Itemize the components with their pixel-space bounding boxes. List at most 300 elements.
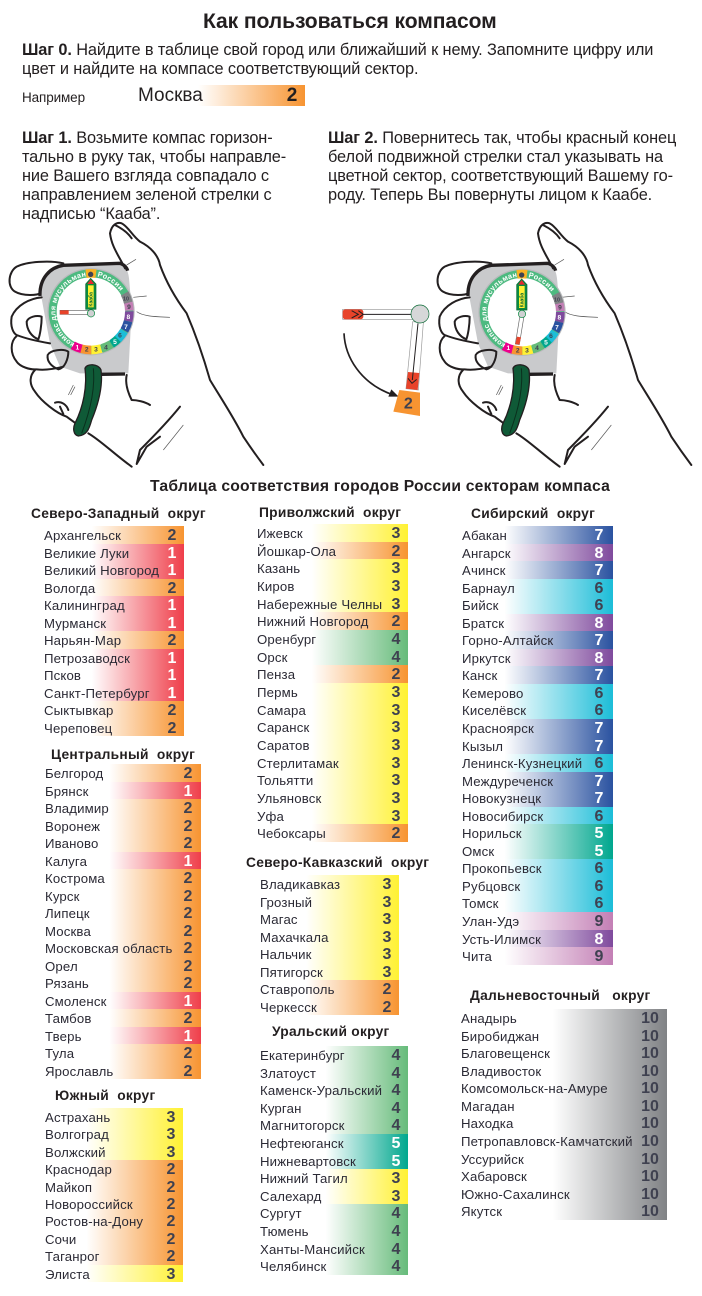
compass dial: 7: [555, 325, 559, 332]
table: Central district: Тамбов: [45, 1011, 92, 1026]
table: North-West district: 1: [168, 614, 176, 632]
hand outline: [438, 223, 691, 467]
heading: Ural district: Уральский округ: [272, 1024, 390, 1039]
table: Siberian district: 6: [595, 808, 603, 825]
table: North-West district: 2: [168, 632, 176, 649]
table: Central district: Тула: [45, 1046, 74, 1061]
table: Southern district: [45, 1108, 183, 1283]
table: Siberian district: 6: [595, 860, 603, 877]
heading: Central district: Центральный округ: [51, 747, 195, 762]
table: Siberian district: 7: [595, 790, 603, 807]
table: Siberian district: Чита: [462, 949, 492, 964]
table: Central district: Орел: [45, 958, 78, 974]
table: North-West district: Великие Луки: [44, 546, 129, 560]
table: Central district: 1: [184, 782, 192, 800]
table: North Caucasus district: 3: [383, 911, 391, 928]
table: Siberian district: Канск: [462, 668, 497, 683]
table: North-West district: 1: [168, 597, 176, 614]
table: Siberian district: 7: [595, 720, 603, 737]
compass dial: 6: [118, 332, 122, 339]
table: Central district: Брянск: [45, 784, 89, 798]
table: Volga district: 3: [392, 808, 400, 824]
table: Ural district: 4: [392, 1258, 400, 1275]
table: Southern district: Майкоп: [45, 1180, 92, 1195]
table: Central district: 2: [184, 818, 192, 834]
heading: Volga district: Приволжский округ: [259, 505, 401, 520]
table: North-West district: 1: [168, 684, 176, 702]
compass dial: 3: [525, 347, 529, 354]
table: Volga district: 4: [392, 649, 400, 666]
compass dial: 4: [104, 344, 108, 351]
table: Central district: 2: [184, 1062, 192, 1080]
compass dial: [48, 268, 135, 356]
table: Siberian district: 9: [595, 948, 603, 965]
table: Central district: Московская область: [45, 941, 172, 956]
table: North-West district: 1: [168, 667, 176, 684]
table: Southern district: Волжский: [45, 1145, 106, 1160]
table: Southern district: Элиста: [45, 1267, 90, 1282]
table: North-West district: Петрозаводск: [44, 650, 130, 666]
heading: Far East district: Дальневосточный округ: [470, 988, 650, 1003]
table: Central district: Иваново: [45, 836, 99, 851]
table: Volga district: Орск: [257, 650, 288, 665]
table: Ural district: 4: [392, 1047, 400, 1064]
table: Siberian district: Омск: [462, 844, 494, 859]
table: Far East district: 10: [641, 1203, 659, 1220]
table: Siberian district: Норильск: [462, 826, 522, 841]
compass dial: 6: [549, 333, 553, 340]
table: North-West district: Череповец: [44, 720, 112, 736]
table: Volga district: 2: [392, 543, 400, 560]
table: North Caucasus district: 2: [383, 998, 391, 1016]
table: Central district: Москва: [45, 924, 91, 938]
table: Volga district: 3: [392, 719, 400, 736]
white pointer pointing at sector 2: [515, 310, 526, 345]
table: Volga district: 2: [392, 825, 400, 842]
table: Siberian district: 7: [595, 632, 603, 649]
hand 2 with compass: [436, 222, 692, 468]
table: Siberian district: 7: [595, 738, 603, 755]
white pointer: [60, 310, 95, 317]
table: North-West district: [44, 526, 184, 736]
table: Siberian district: 8: [595, 931, 603, 948]
compass dial: России: [98, 272, 123, 291]
table: Ural district: 3: [392, 1170, 400, 1187]
table: Central district: [45, 764, 201, 1080]
table: Southern district: 2: [167, 1179, 175, 1196]
table: Siberian district: 8: [595, 615, 603, 632]
table: Volga district: 4: [392, 631, 400, 648]
example bar: Moscow: [138, 85, 305, 106]
table: Central district: Липецк: [45, 906, 90, 921]
compass dial: 10: [554, 297, 560, 303]
table: Ural district: 4: [392, 1100, 400, 1117]
table: Volga district: Уфа: [257, 808, 284, 824]
example bar: Moscow: 2: [287, 85, 297, 106]
table: Central district: 1: [184, 1028, 192, 1044]
table: Volga district: Пермь: [257, 685, 298, 700]
table: North Caucasus district: 3: [383, 964, 391, 980]
table: Central district: 2: [184, 940, 192, 957]
table: Southern district: 2: [167, 1248, 175, 1265]
curved arrow: [344, 333, 399, 397]
table title: Таблица соответствия городов России секторам компаса: [150, 478, 610, 495]
table: Volga district: 3: [392, 578, 400, 595]
hand outline: [10, 223, 263, 467]
table: Southern district: Ростов-на-Дону: [45, 1214, 143, 1229]
table: Far East district: Магадан: [461, 1099, 515, 1114]
table: Southern district: 3: [167, 1109, 175, 1126]
table: Far East district: 10: [641, 1063, 659, 1080]
table: North-West district: Псков: [44, 668, 81, 683]
table: Siberian district: Абакан: [462, 528, 507, 543]
table: Volga district: Ижевск: [257, 526, 303, 541]
table: Siberian district: 8: [595, 650, 603, 667]
table: Siberian district: 5: [595, 825, 603, 842]
table: Ural district: [260, 1046, 408, 1275]
table: North-West district: Сыктывкар: [44, 703, 114, 718]
table: Siberian district: 6: [595, 878, 603, 895]
table: Siberian district: Барнаул: [462, 581, 515, 596]
table: North-West district: Санкт-Петербург: [44, 686, 150, 700]
table: Ural district: Ханты-Мансийск: [260, 1242, 365, 1257]
table: Siberian district: Новосибирск: [462, 809, 543, 824]
table: Central district: 2: [184, 1045, 192, 1062]
table: Far East district: Благовещенск: [461, 1046, 550, 1061]
table: Siberian district: Ленинск-Кузнецкий: [462, 756, 582, 771]
table: Central district: Белгород: [45, 766, 103, 781]
illustrations: hands with compass: [8, 222, 692, 468]
table: Ural district: 5: [392, 1153, 400, 1170]
table: Siberian district: Усть-Илимск: [462, 932, 541, 947]
table: Central district: 2: [184, 888, 192, 904]
table: Southern district: 3: [167, 1144, 175, 1161]
table: Far East district: 10: [641, 1028, 659, 1045]
table: North Caucasus district: Грозный: [260, 894, 312, 910]
table: Far East district: [461, 1009, 667, 1220]
table: Siberian district: Бийск: [462, 598, 499, 613]
table: Siberian district: Горно-Алтайск: [462, 633, 553, 648]
table: Southern district: Новороссийск: [45, 1197, 133, 1212]
table: Volga district: 3: [392, 790, 400, 807]
table: North Caucasus district: 2: [383, 981, 391, 998]
compass dial: 2: [516, 347, 520, 354]
table: Far East district: Комсомольск-на-Амуре: [461, 1081, 608, 1096]
table: Ural district: Сургут: [260, 1206, 302, 1221]
table: North-West district: Нарьян-Мар: [44, 633, 121, 648]
table: Volga district: Пенза: [257, 667, 295, 682]
table: North Caucasus district: Черкесск: [260, 1000, 317, 1014]
heading: North Caucasus district: Северо-Кавказский округ: [246, 855, 429, 870]
table: Far East district: 10: [641, 1168, 659, 1185]
table: Ural district: Нефтеюганск: [260, 1136, 344, 1151]
table: Siberian district: 7: [595, 562, 603, 579]
table: Ural district: Златоуст: [260, 1066, 316, 1081]
table: Southern district: Волгоград: [45, 1127, 109, 1142]
orange sector 2: 2: [404, 395, 413, 412]
table: Volga district: 2: [392, 613, 400, 630]
table: Volga district: Саранск: [257, 720, 309, 735]
step 2 text: Шаг 2. Повернитесь так, чтобы красный конец белой подвижной стрелки стал указывать на цветной сектор, соответствующий Вашему го- роду. Теперь Вы повернуты лицом к Каабе.: [328, 129, 676, 204]
compass dial: России: [528, 272, 554, 292]
table: Far East district: Владивосток: [461, 1064, 541, 1079]
table: Ural district: Тюмень: [260, 1224, 309, 1239]
compass dial: 5: [113, 339, 117, 346]
table: Siberian district: Красноярск: [462, 721, 534, 736]
compass dial: 1: [506, 345, 510, 352]
table: Siberian district: 6: [595, 597, 603, 614]
table: Siberian district: Междуреченск: [462, 774, 553, 789]
table: Ural district: Салехард: [260, 1189, 321, 1204]
table: Siberian district: 6: [595, 702, 603, 719]
compass body: [41, 263, 132, 373]
table: North Caucasus district: Ставрополь: [260, 982, 335, 997]
horizontal pointer: [343, 309, 418, 319]
table: Siberian district: Иркутск: [462, 651, 511, 666]
green strap: [502, 365, 529, 436]
table: Volga district: [257, 524, 408, 842]
pointer at new position: [406, 322, 423, 390]
table: Volga district: Казань: [257, 561, 300, 576]
table: Far East district: 10: [641, 1045, 659, 1062]
table: Siberian district: 7: [595, 773, 603, 790]
table: Far East district: Биробиджан: [461, 1029, 539, 1044]
hand 1 with compass: [8, 222, 264, 468]
table: Far East district: 10: [641, 1098, 659, 1115]
table: Siberian district: 6: [595, 685, 603, 702]
table: North Caucasus district: Нальчик: [260, 947, 312, 962]
table: Far East district: 10: [641, 1115, 659, 1132]
table: North Caucasus district: Махачкала: [260, 930, 329, 944]
table: Volga district: 3: [392, 755, 400, 772]
table: Southern district: 2: [167, 1213, 175, 1230]
table: North-West district: 1: [168, 562, 176, 579]
table: North-West district: 2: [168, 527, 176, 544]
compass dial: 9: [558, 305, 562, 312]
table: Southern district: Сочи: [45, 1232, 76, 1247]
table: Central district: 2: [184, 922, 192, 940]
table: Volga district: Ульяновск: [257, 791, 321, 806]
table: Central district: Калуга: [45, 854, 87, 868]
table: Volga district: Самара: [257, 703, 306, 718]
table: Far East district: Анадырь: [461, 1011, 517, 1026]
table: Siberian district: 6: [595, 580, 603, 597]
compass dial: 8: [557, 315, 561, 322]
table: Far East district: Якутск: [461, 1204, 502, 1219]
title: Как пользоваться компасом: [203, 10, 497, 33]
table: North Caucasus district: 3: [383, 928, 391, 946]
table: Ural district: Каменск-Уральский: [260, 1083, 382, 1098]
green Kaaba arrow: Кааба: [87, 292, 94, 307]
table: Siberian district: 6: [595, 895, 603, 912]
table: Ural district: Екатеринбург: [260, 1048, 345, 1063]
table: Far East district: Хабаровск: [461, 1169, 527, 1184]
compass dial: [478, 268, 566, 356]
compass body: [469, 263, 560, 373]
table: Central district: 2: [184, 835, 192, 852]
table: Far East district: 10: [641, 1151, 659, 1168]
table: Siberian district: 7: [595, 527, 603, 544]
table: Ural district: 3: [392, 1188, 400, 1205]
heading: North-West district: Северо-Западный округ: [31, 506, 206, 521]
compass dial: 10: [123, 297, 129, 303]
table: North-West district: Великий Новгород: [44, 563, 159, 578]
table: North-West district: Калининград: [44, 598, 125, 613]
table: Central district: Кострома: [45, 871, 105, 886]
table: Volga district: Стерлитамак: [257, 756, 339, 771]
compass dial: компас для мусульман: [52, 272, 86, 347]
table: Central district: Тверь: [45, 1028, 82, 1044]
table: Ural district: Нижневартовск: [260, 1154, 356, 1169]
table: North-West district: Вологда: [44, 580, 95, 596]
table: Siberian district: Ачинск: [462, 563, 506, 578]
heading: Southern district: Южный округ: [55, 1088, 155, 1103]
table: Central district: 2: [184, 800, 192, 817]
table: Siberian district: 9: [595, 913, 603, 930]
table: North Caucasus district: 3: [383, 894, 391, 910]
table: Volga district: 3: [392, 684, 400, 701]
table: Siberian district: Томск: [462, 896, 499, 911]
table: North-West district: 1: [168, 650, 176, 666]
table: North Caucasus district: Пятигорск: [260, 964, 323, 980]
table: Volga district: 3: [392, 596, 400, 613]
table: Siberian district: 6: [595, 755, 603, 772]
table: Ural district: Нижний Тагил: [260, 1171, 348, 1186]
table: Central district: Воронеж: [45, 818, 100, 834]
table: Siberian district: Ангарск: [462, 546, 511, 561]
table: Southern district: 3: [167, 1266, 175, 1283]
table: North-West district: 2: [168, 702, 176, 719]
table: Siberian district: Кызыл: [462, 739, 503, 754]
compass dial: 3: [94, 347, 98, 354]
table: Far East district: 10: [641, 1080, 659, 1097]
table: Volga district: 3: [392, 525, 400, 542]
table: Siberian district: Киселёвск: [462, 703, 526, 718]
table: Central district: 2: [184, 958, 192, 974]
step 0 text: Шаг 0. Найдите в таблице свой город или ближайший к нему. Запомните цифру или цвет и найдите на компасе соответствующий сектор.: [22, 41, 653, 78]
table: Far East district: Находка: [461, 1116, 514, 1131]
table: Southern district: 3: [167, 1126, 175, 1143]
compass dial: 2: [85, 347, 89, 354]
table: Siberian district: Братск: [462, 616, 504, 631]
table: Volga district: Саратов: [257, 738, 310, 753]
table: Volga district: Киров: [257, 579, 294, 594]
table: Volga district: Тольятти: [257, 773, 313, 788]
table: Far East district: 10: [641, 1010, 659, 1027]
table: Ural district: 4: [392, 1223, 400, 1240]
table: North-West district: 2: [168, 580, 176, 596]
table: Ural district: Курган: [260, 1101, 302, 1116]
inset: pointer rotation diagram: [343, 305, 429, 416]
table: Volga district: 3: [392, 737, 400, 754]
table: Siberian district: Улан-Удэ: [462, 914, 519, 929]
table: North-West district: 1: [168, 544, 176, 562]
table: Ural district: 4: [392, 1065, 400, 1082]
table: Central district: 2: [184, 905, 192, 922]
table: Far East district: Южно-Сахалинск: [461, 1187, 570, 1202]
table: Far East district: 10: [641, 1186, 659, 1203]
example bar: Moscow: Москва: [138, 85, 203, 106]
heading: Siberian district: Сибирский округ: [471, 506, 595, 521]
table: Ural district: 5: [392, 1135, 400, 1152]
table: Volga district: Набережные Челны: [257, 597, 382, 612]
table: Volga district: Оренбург: [257, 632, 316, 647]
table: North Caucasus district: [260, 875, 399, 1016]
table: Ural district: 4: [392, 1117, 400, 1134]
compass dial: 5: [544, 340, 548, 347]
table: Southern district: Астрахань: [45, 1110, 110, 1125]
table: Siberian district: 8: [595, 545, 603, 562]
table: Central district: Рязань: [45, 976, 89, 991]
table: Siberian district: Рубцовск: [462, 879, 520, 894]
table: North Caucasus district: Владикавказ: [260, 877, 340, 892]
table: North Caucasus district: 3: [383, 876, 391, 893]
table: Volga district: 3: [392, 702, 400, 719]
table: Siberian district: [462, 526, 613, 965]
table: Southern district: 2: [167, 1231, 175, 1248]
table: Volga district: 3: [392, 772, 400, 789]
table: North-West district: Архангельск: [44, 528, 121, 543]
table: North Caucasus district: 3: [383, 946, 391, 963]
table: Volga district: Нижний Новгород: [257, 614, 368, 629]
table: Southern district: 2: [167, 1196, 175, 1213]
table: Southern district: 2: [167, 1161, 175, 1178]
table: Far East district: Петропавловск-Камчатский: [461, 1134, 633, 1149]
compass dial: 8: [126, 314, 130, 321]
table: Ural district: 4: [392, 1241, 400, 1258]
table: Central district: 1: [184, 992, 192, 1010]
table: Far East district: Уссурийск: [461, 1152, 524, 1167]
table: Ural district: Магнитогорск: [260, 1118, 345, 1133]
example label: Например: [22, 90, 85, 105]
table: Southern district: Таганрог: [45, 1249, 100, 1264]
table: Ural district: 4: [392, 1082, 400, 1099]
table: Siberian district: Новокузнецк: [462, 791, 541, 806]
compass dial: компас для мусульман: [482, 273, 517, 348]
table: Volga district: Чебоксары: [257, 826, 326, 841]
table: Volga district: Йошкар-Ола: [257, 544, 336, 559]
table: Central district: 2: [184, 1010, 192, 1027]
green strap: [74, 365, 101, 436]
table: Ural district: Челябинск: [260, 1259, 326, 1274]
compass dial: 9: [127, 304, 131, 311]
table: Southern district: Краснодар: [45, 1162, 112, 1177]
table: Central district: 2: [184, 870, 192, 887]
table: Central district: Смоленск: [45, 994, 107, 1008]
table: North-West district: Мурманск: [44, 616, 106, 630]
compass dial: 4: [535, 345, 539, 352]
table: Volga district: 3: [392, 560, 400, 577]
hub: [411, 305, 429, 323]
table: Central district: Курск: [45, 888, 80, 904]
table: North-West district: 2: [168, 720, 176, 736]
table: Ural district: 4: [392, 1205, 400, 1222]
table: Siberian district: Кемерово: [462, 686, 523, 701]
table: Volga district: 2: [392, 666, 400, 683]
table: Siberian district: 5: [595, 843, 603, 860]
table: Central district: Владимир: [45, 801, 109, 816]
table: Siberian district: 7: [595, 667, 603, 684]
green Kaaba arrow: Кааба: [518, 293, 525, 307]
table: Siberian district: Прокопьевск: [462, 861, 542, 876]
table: Central district: 2: [184, 765, 192, 782]
table: North Caucasus district: Магас: [260, 912, 298, 927]
table: Central district: Ярославль: [45, 1064, 113, 1078]
compass dial: 1: [75, 344, 79, 351]
table: Far East district: 10: [641, 1133, 659, 1150]
step 1 text: Шаг 1. Возьмите компас горизон- тально в руку так, чтобы направле- ние Вашего взгляда совпадало с направлением зеленой стрелки с надписью “Кааба”.: [22, 129, 286, 223]
compass dial: 7: [124, 324, 128, 331]
